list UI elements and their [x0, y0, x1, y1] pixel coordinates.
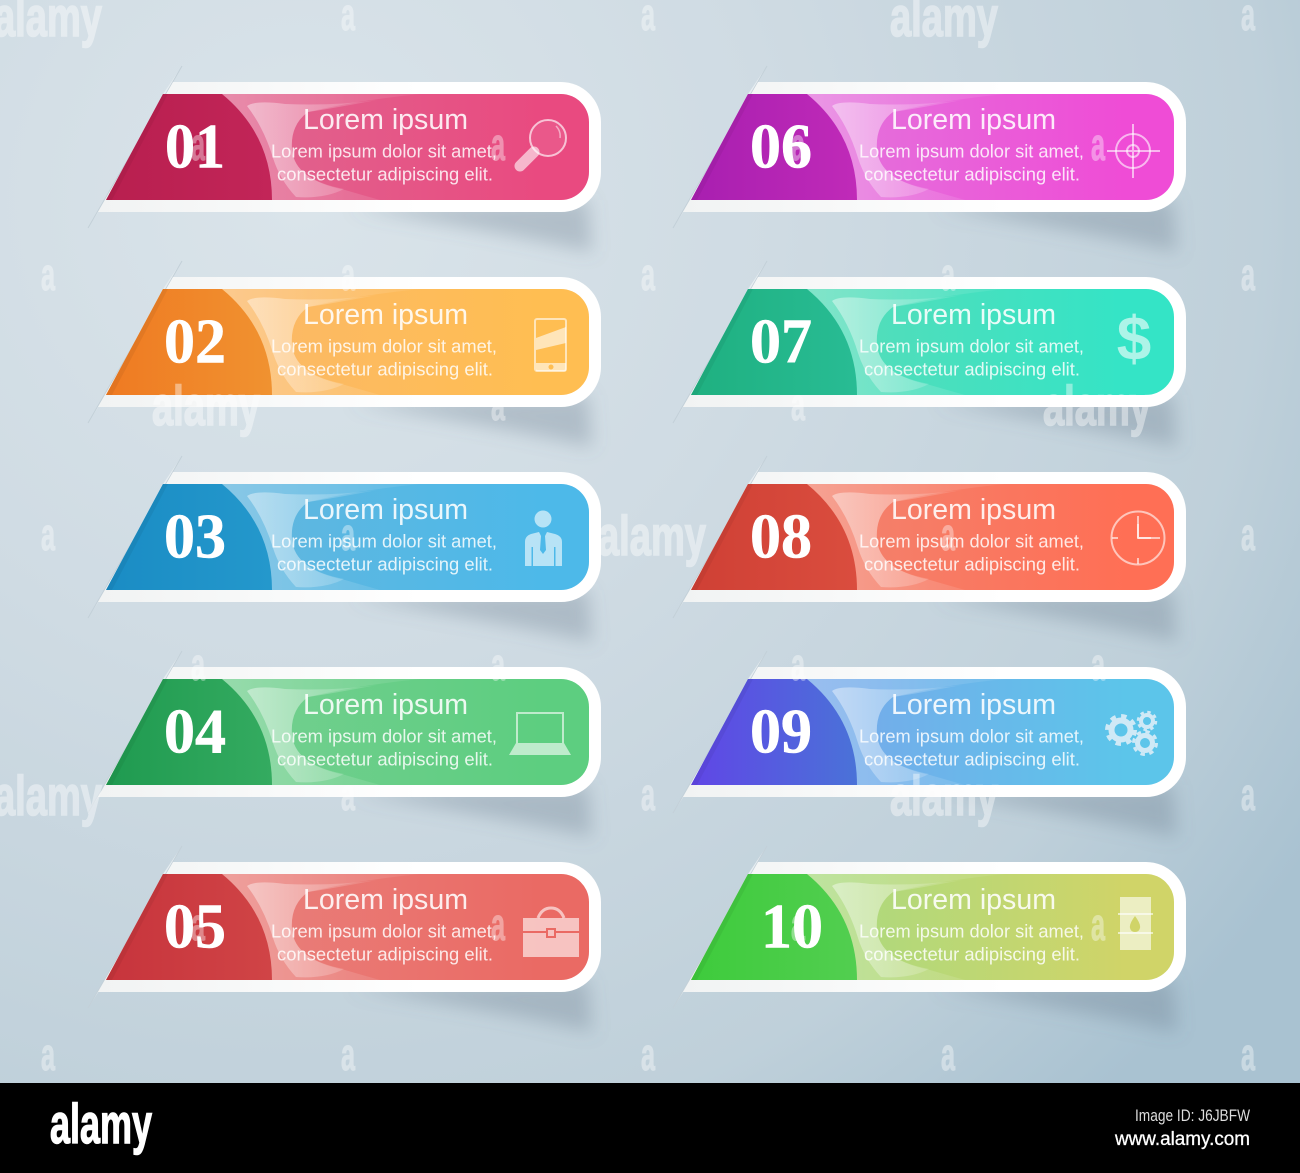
watermarks: a	[191, 899, 206, 950]
number 06: 06	[750, 110, 812, 182]
description 06: Lorem ipsum dolor sit amet,	[859, 140, 1084, 162]
icon: oil barrel	[1118, 897, 1153, 950]
watermarks: a	[41, 1029, 56, 1080]
number 01: 01	[165, 110, 225, 182]
card 05	[88, 846, 601, 1032]
watermarks: a	[641, 1029, 656, 1080]
description 08: consectetur adipiscing elit.	[864, 554, 1080, 574]
footer logo: alamy	[50, 1092, 152, 1155]
icon: smartphone	[535, 319, 566, 371]
description 04: Lorem ipsum dolor sit amet,	[271, 726, 497, 746]
description 02: consectetur adipiscing elit.	[277, 358, 493, 380]
card 03	[88, 456, 601, 642]
watermarks: a	[41, 509, 56, 560]
watermarks: a	[941, 249, 956, 300]
description 09: consectetur adipiscing elit.	[864, 748, 1080, 770]
watermarks: a	[341, 1029, 356, 1080]
number 10: 10	[761, 890, 823, 962]
watermarks: a	[641, 249, 656, 300]
description 04	[271, 726, 497, 770]
watermarks: a	[491, 899, 506, 950]
description 03: consectetur adipiscing elit.	[277, 554, 493, 574]
description 07	[859, 336, 1084, 380]
watermarks: a	[791, 119, 806, 170]
watermarks: a	[1091, 639, 1106, 690]
watermarks: a	[791, 379, 806, 430]
number 03: 03	[164, 500, 226, 572]
watermarks: alamy	[890, 764, 998, 827]
icon: businessman	[525, 510, 562, 566]
number 07: 07	[750, 306, 812, 376]
description 04: consectetur adipiscing elit.	[277, 748, 493, 770]
description 01: Lorem ipsum dolor sit amet,	[271, 140, 497, 162]
description 05: Lorem ipsum dolor sit amet,	[271, 920, 497, 942]
description 10: Lorem ipsum dolor sit amet,	[859, 920, 1084, 942]
description 06: consectetur adipiscing elit.	[864, 164, 1080, 184]
card 01	[88, 66, 601, 252]
icon: dollar: $	[1117, 305, 1151, 374]
description 10	[859, 920, 1084, 964]
description 03: Lorem ipsum dolor sit amet,	[271, 530, 497, 552]
watermarks: a	[1241, 249, 1256, 300]
heading 01: Lorem ipsum	[303, 104, 468, 136]
icon: briefcase	[523, 908, 579, 957]
footer bar	[0, 1083, 1300, 1173]
description 05: consectetur adipiscing elit.	[277, 944, 493, 964]
watermarks: alamy	[1043, 374, 1151, 437]
image id: Image ID: J6JBFW	[1135, 1106, 1250, 1125]
number 02: 02	[164, 306, 226, 376]
icon: clock	[1112, 512, 1164, 564]
heading 10: Lorem ipsum	[891, 884, 1056, 916]
icon: magnifier	[520, 120, 566, 166]
heading 06: Lorem ipsum	[891, 104, 1056, 136]
watermarks: a	[341, 509, 356, 560]
description 10: consectetur adipiscing elit.	[864, 944, 1080, 964]
description 09	[859, 726, 1084, 770]
watermarks: a	[491, 639, 506, 690]
card 08	[673, 456, 1186, 642]
watermarks: a	[941, 509, 956, 560]
watermarks: a	[491, 119, 506, 170]
watermarks: a	[41, 249, 56, 300]
watermarks: alamy	[598, 504, 706, 567]
description 07: consectetur adipiscing elit.	[864, 358, 1080, 380]
watermarks: a	[191, 119, 206, 170]
heading 03: Lorem ipsum	[303, 494, 468, 526]
card 09	[673, 651, 1186, 837]
watermarks: a	[941, 1029, 956, 1080]
icon: laptop	[509, 713, 571, 755]
heading 07: Lorem ipsum	[891, 299, 1056, 331]
watermarks: a	[1091, 899, 1106, 950]
watermarks: alamy	[152, 374, 260, 437]
watermarks: a	[491, 379, 506, 430]
card 07	[673, 261, 1186, 447]
description 02: Lorem ipsum dolor sit amet,	[271, 336, 497, 356]
watermarks: a	[641, 769, 656, 820]
description 01: consectetur adipiscing elit.	[277, 164, 493, 184]
description 08: Lorem ipsum dolor sit amet,	[859, 530, 1084, 552]
watermarks: a	[191, 639, 206, 690]
watermarks: a	[341, 769, 356, 820]
description 01	[271, 140, 497, 184]
heading 02: Lorem ipsum	[303, 299, 468, 331]
description 07: Lorem ipsum dolor sit amet,	[859, 336, 1084, 356]
description 09: Lorem ipsum dolor sit amet,	[859, 726, 1084, 746]
number 09: 09	[750, 696, 812, 766]
heading 09: Lorem ipsum	[891, 689, 1056, 721]
number 08: 08	[750, 500, 812, 572]
watermarks: a	[341, 249, 356, 300]
card 10	[673, 846, 1186, 1032]
description 05	[271, 920, 497, 964]
watermarks: a	[1241, 509, 1256, 560]
icon: gears	[1107, 712, 1156, 754]
description 08	[859, 530, 1084, 574]
card 04	[88, 651, 601, 837]
description 03	[271, 530, 497, 574]
website: www.alamy.com	[1114, 1129, 1250, 1150]
heading 08: Lorem ipsum	[891, 494, 1056, 526]
card 02	[88, 261, 601, 447]
heading 05: Lorem ipsum	[303, 884, 468, 916]
card 06	[673, 66, 1186, 252]
watermarks: a	[791, 899, 806, 950]
watermarks: a	[1241, 769, 1256, 820]
watermarks: a	[1241, 1029, 1256, 1080]
number 04: 04	[164, 696, 226, 766]
watermarks: a	[1091, 119, 1106, 170]
icon: target	[1107, 124, 1160, 178]
number 05: 05	[164, 890, 226, 962]
description 06	[859, 140, 1084, 184]
watermarks: a	[791, 639, 806, 690]
heading 04: Lorem ipsum	[303, 689, 468, 721]
description 02	[271, 336, 497, 380]
